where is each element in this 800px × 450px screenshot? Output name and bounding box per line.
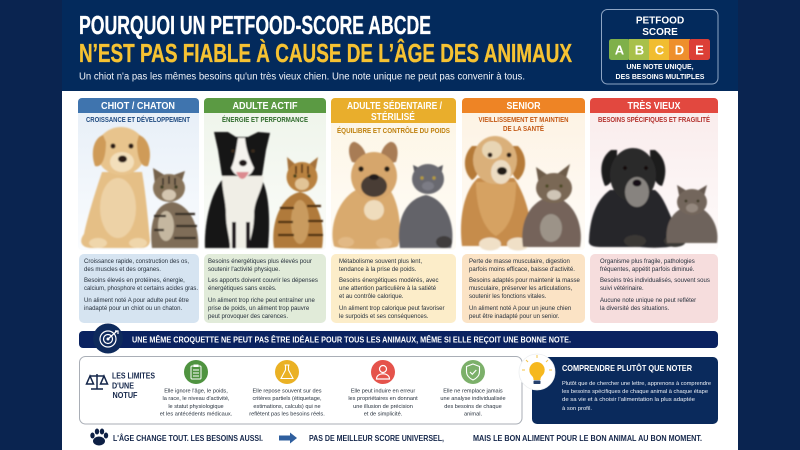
footer message: PAS DE MEILLEUR SCORE UNIVERSEL, <box>309 434 444 443</box>
panel: comprendre plutot que noter: Plutôt que de chercher une lettre, apprenons à comprendre <box>562 381 711 387</box>
title: N’EST PAS FIABLE À CAUSE DE L’ÂGE DES ANIMAUX <box>79 38 572 68</box>
text block: chiot: Un aliment noté A pour adulte peut être <box>84 298 190 304</box>
text: limite 2: Elle repose souvent sur des <box>252 388 322 394</box>
title <box>79 12 572 68</box>
icon: target <box>93 324 123 354</box>
text: limite 3: et de simplicité. <box>364 412 403 418</box>
illustration: puppy and kitten <box>81 127 198 248</box>
text: limite 4 <box>440 388 506 418</box>
text block: adulte actif: prise de poids, un aliment trop pauvre <box>208 306 310 312</box>
text block: tres vieux: Besoins très individualisés, souvent sous <box>600 278 710 284</box>
text block: chiot <box>79 254 199 323</box>
badge: petfood score: DES BESOINS MULTIPLES <box>616 74 705 81</box>
text block: adulte sedentaire: une attention particulière à la satiété <box>339 286 437 292</box>
text block: chiot: Croissance rapide, construction des os, <box>84 259 189 265</box>
panel: comprendre plutot que noter <box>532 357 718 424</box>
banner <box>79 331 718 348</box>
heading: les limites: NOTUF <box>112 391 138 400</box>
text block: senior: peut être inadapté pour un senior. <box>469 314 560 320</box>
icon: shield <box>461 360 485 384</box>
heading: les limites: LES LIMITES <box>112 372 155 380</box>
panel: comprendre plutot que noter: COMPRENDRE PLUTÔT QUE NOTER <box>562 362 692 373</box>
text block: tres vieux <box>590 254 718 323</box>
text: limite 1: et les antécédents médicaux. <box>160 412 233 418</box>
badge: petfood score: D <box>675 42 684 58</box>
text block: tres vieux: fréquentes, appétit parfois diminué. <box>600 267 695 273</box>
footer message: L'ÂGE CHANGE TOUT. LES BESOINS AUSSI. <box>113 434 263 443</box>
panel: comprendre plutot que noter: de sa vie et à choisir l'alimentation la plus adaptée <box>562 397 695 403</box>
icon: clipboard <box>184 360 208 384</box>
header band <box>62 0 738 91</box>
panel: chiot / chaton <box>78 98 199 250</box>
panel: comprendre plutot que noter: à son profil. <box>562 406 592 412</box>
text block: adulte actif: soutenir l'activité physique. <box>208 267 280 273</box>
text block: tres vieux: Aucune note unique ne peut refléter <box>600 298 696 304</box>
panel: tres vieux <box>589 98 718 250</box>
icon: flask <box>275 360 299 384</box>
panel: tres vieux: TRÈS VIEUX <box>628 99 681 112</box>
text block: adulte actif: Besoins énergétiques plus élevés pour <box>208 259 312 265</box>
illustration: old black labrador and cat <box>589 148 717 248</box>
text: limite 1: Elle ignore l'âge, le poids, <box>164 388 228 394</box>
text block: senior: Perte de masse musculaire, digestion <box>469 259 570 265</box>
text block: adulte sedentaire: Métabolisme souvent plus lent, <box>339 259 422 265</box>
badge: petfood score: B <box>635 42 644 58</box>
text block: adulte sedentaire: Un aliment trop calorique peut favoriser <box>339 306 445 312</box>
text block: senior: Un aliment noté A pour un jeune chien <box>469 306 571 312</box>
panel: adulte actif: ADULTE ACTIF <box>232 101 298 112</box>
icon: person <box>371 360 395 384</box>
panel: senior: DE LA SANTÉ <box>503 124 544 133</box>
text: limite 3 <box>348 388 418 418</box>
heading: les limites <box>112 372 155 400</box>
badge: petfood score: PETFOOD <box>636 16 684 26</box>
text block: adulte actif: Les apports doivent couvrir les dépenses <box>208 278 318 284</box>
panel: tres vieux: BESOINS SPÉCIFIQUES ET FRAGILITÉ <box>598 115 710 124</box>
text block: adulte actif <box>204 254 326 323</box>
footer message <box>90 428 702 446</box>
badge: petfood score: E <box>695 42 704 58</box>
panel: senior: VIEILLISSEMENT ET MAINTIEN <box>478 117 568 124</box>
text: limite 3: une illusion de précision <box>353 404 413 410</box>
arrow <box>279 432 297 444</box>
badge: petfood score: A <box>615 42 625 58</box>
panel: adulte sedentaire: ÉQUILIBRE ET CONTRÔLE DU POIDS <box>337 126 450 135</box>
panel: comprendre plutot que noter: les besoins spécifiques de chaque animal à chaque étape <box>562 389 708 395</box>
text block: chiot: inadapté pour un chiot ou un chaton. <box>84 306 182 312</box>
text: limite 4: animal. <box>464 412 482 418</box>
footer message: MAIS LE BON ALIMENT POUR LE BON ANIMAL AU BON MOMENT. <box>473 434 702 443</box>
text block: senior <box>462 254 585 323</box>
icon: light bulb <box>519 354 555 390</box>
illustration: senior golden retriever and cat <box>461 136 581 250</box>
badge: petfood score: C <box>655 42 665 58</box>
heading: les limites: D'UNE <box>112 382 134 390</box>
text: limite 1: le statut physiologique <box>168 404 224 410</box>
text: limite 1 <box>160 388 233 418</box>
text block: adulte sedentaire: Besoins énergétiques modérés, avec <box>339 278 438 284</box>
text: limite 2: estimations, calculs) qui ne <box>253 404 321 410</box>
illustration: french bulldog and grey cat <box>332 142 452 249</box>
illustration: border collie and tabby cat <box>205 132 323 248</box>
panel: adulte sedentaire <box>331 98 456 250</box>
text: limite 4: Elle ne remplace jamais <box>443 388 503 394</box>
banner: UNE MÊME CROQUETTE NE PEUT PAS ÊTRE IDÉALE POUR TOUS LES ANIMAUX, MÊME SI ELLE REÇOIT UNE BONNE NOTE. <box>132 334 571 344</box>
text: limite 4: une analyse individualisée <box>440 396 506 402</box>
text block: chiot: Besoins élevés en protéines, énergie, <box>84 278 185 284</box>
icon: paw <box>90 428 108 446</box>
panel: chiot / chaton: CROISSANCE ET DÉVELOPPEMENT <box>86 115 191 124</box>
badge: petfood score: SCORE <box>642 27 678 38</box>
text block: adulte sedentaire: tendance à la prise de poids. <box>339 267 417 273</box>
subtitle: Un chiot n'a pas les mêmes besoins qu'un très vieux chien. Une note unique ne peut pas convenir à tous. <box>79 72 525 82</box>
badge: petfood score <box>602 10 718 84</box>
text block: chiot: des muscles et des organes. <box>84 267 161 273</box>
text block: senior: musculaire, préserver les articulations, <box>469 286 572 292</box>
panel: adulte actif: ÉNERGIE ET PERFORMANCE <box>222 115 308 124</box>
text block: adulte actif: peut provoquer des carences. <box>208 314 288 320</box>
panel: chiot / chaton: CHIOT / CHATON <box>101 101 175 112</box>
text block: tres vieux: Organisme plus fragile, pathologies <box>600 259 695 265</box>
panel: adulte sedentaire: STÉRILISÉ <box>371 110 415 123</box>
icon: scales <box>86 374 108 389</box>
text: limite 1: la race, le niveau d'activité, <box>162 396 230 402</box>
text block: adulte sedentaire: et au contrôle calorique. <box>339 294 404 300</box>
text block: adulte sedentaire: le surpoids et ses conséquences. <box>339 314 429 320</box>
panel: senior: SENIOR <box>506 101 541 112</box>
text block: adulte actif: énergétiques sans excès. <box>208 286 277 292</box>
text block: chiot: calcium, phosphore et certains acides gras. <box>84 286 198 292</box>
text block: senior: Besoins adaptés pour maintenir la masse <box>469 278 581 284</box>
text: limite 2: critères partiels (étiquetage, <box>252 396 322 402</box>
white content panel <box>62 91 738 450</box>
text block: tres vieux: la diversité des situations. <box>600 306 670 312</box>
panel: adulte actif <box>204 98 326 250</box>
panel: les limites <box>80 356 522 424</box>
text block: senior: parfois moins efficace, baisse d'activité. <box>469 267 575 273</box>
text: limite 2 <box>249 388 325 418</box>
panel: adulte sedentaire: ADULTE SÉDENTAIRE / <box>347 99 442 112</box>
panel: senior <box>461 98 585 250</box>
text block: senior: soutenir les fonctions vitales. <box>469 294 547 300</box>
badge: petfood score: UNE NOTE UNIQUE, <box>626 64 694 71</box>
text: limite 3: Elle peut induire en erreur <box>351 388 415 394</box>
text: limite 2: reflètent pas les besoins réels. <box>249 412 325 418</box>
title: POURQUOI UN PETFOOD-SCORE ABCDE <box>79 12 431 40</box>
text block: adulte sedentaire <box>331 254 456 323</box>
text block: tres vieux: suivi vétérinaire. <box>600 286 644 292</box>
text block: adulte actif: Un aliment trop riche peut entraîner une <box>208 298 316 304</box>
text: limite 4: des besoins de chaque <box>444 404 502 410</box>
text: limite 3: les propriétaires en donnant <box>348 396 418 402</box>
